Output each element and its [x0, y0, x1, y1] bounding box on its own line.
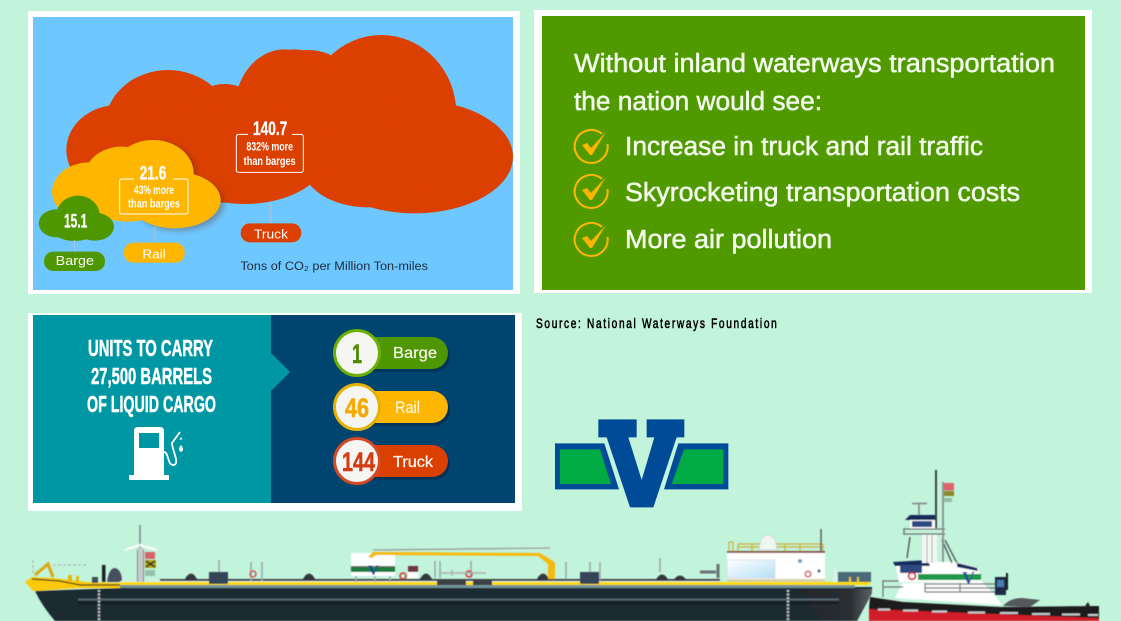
rail value and callout: 43% more [134, 183, 174, 197]
rail value and callout [120, 163, 188, 214]
legend: rail: Rail [142, 246, 166, 261]
panel: without inland waterways [534, 10, 1092, 293]
crane [368, 548, 555, 579]
row: rail: 46 [345, 393, 369, 423]
heading: 27,500 BARRELS [91, 363, 212, 389]
item: air pollution: More air pollution [625, 226, 832, 254]
item: transportation costs: Skyrocketing transportation costs [625, 179, 1020, 207]
deck cabin with V: V [368, 563, 379, 579]
barge hull [35, 587, 872, 621]
tug wheelhouse [910, 520, 935, 529]
heading: the nation would see: [574, 88, 822, 116]
tug railings [883, 580, 995, 597]
barge value: 15.1 [64, 211, 87, 232]
icon: fuel pump [129, 427, 183, 480]
rail cloud shadow [116, 142, 225, 231]
heading [87, 335, 216, 417]
bow fittings [68, 565, 122, 583]
deck cabin with V [351, 553, 395, 582]
source line: Source: National Waterways Foundation [536, 316, 777, 331]
heading: UNITS TO CARRY [88, 335, 213, 361]
tug stern gear [995, 573, 1090, 607]
tug black sheer band [869, 597, 1099, 618]
rail cloud [52, 140, 221, 228]
row: truck: Truck [393, 454, 433, 471]
legend: rail [124, 227, 185, 263]
logo: V emblem [555, 419, 728, 507]
tug lower cabin [895, 562, 982, 582]
deck poles [219, 558, 660, 581]
caption: Tons of CO₂ per Million Ton-miles [240, 259, 428, 273]
item: air pollution [575, 223, 832, 256]
tug rub rail [878, 610, 1098, 615]
rail value and callout: than barges [128, 196, 180, 210]
tug white hull [895, 582, 1002, 605]
valves [250, 566, 486, 579]
panel: units to carry liquid cargo [28, 313, 522, 511]
panel: CO2 emissions clouds [28, 11, 520, 294]
row: rail [334, 384, 450, 430]
heading [574, 50, 1055, 116]
mast with flags [125, 525, 157, 582]
legend: truck [241, 203, 301, 242]
truck value and callout: 832% more [246, 140, 293, 154]
heading: Without inland waterways transportation [574, 50, 1055, 78]
ship: tugboat [869, 470, 1099, 621]
legend: barge: Barge [56, 253, 94, 268]
tug tower [922, 535, 937, 563]
row: truck: 144 [342, 447, 375, 477]
legend: truck: Truck [254, 226, 288, 241]
aft deckhouse [700, 529, 871, 582]
tug radar [912, 504, 927, 515]
row: barge [334, 330, 450, 376]
row: barge: 1 [352, 339, 362, 369]
bow deck [25, 577, 120, 591]
heading: OF LIQUID CARGO [87, 391, 216, 417]
truck value and callout: than barges [244, 154, 296, 168]
arrow [271, 353, 290, 391]
deck domes and fittings [184, 572, 687, 585]
truck value and callout [236, 119, 303, 172]
row: truck [334, 438, 450, 484]
bow crane [35, 564, 53, 577]
ship: tugboat: V [962, 568, 975, 588]
tug masts and flags [936, 470, 954, 562]
barge cloud [39, 196, 114, 241]
item: truck and rail traffic: Increase in truck and rail traffic [625, 133, 983, 161]
truck value and callout: 140.7 [253, 119, 287, 140]
ship: tank barge [25, 525, 872, 621]
tug red hull [869, 608, 1099, 621]
rail value and callout: 21.6 [140, 163, 167, 184]
deck stripe and pipe [120, 582, 870, 585]
row: barge: Barge [393, 345, 437, 362]
row: rail: Rail [395, 399, 420, 417]
truck cloud [66, 35, 513, 213]
legend: barge [44, 240, 105, 271]
